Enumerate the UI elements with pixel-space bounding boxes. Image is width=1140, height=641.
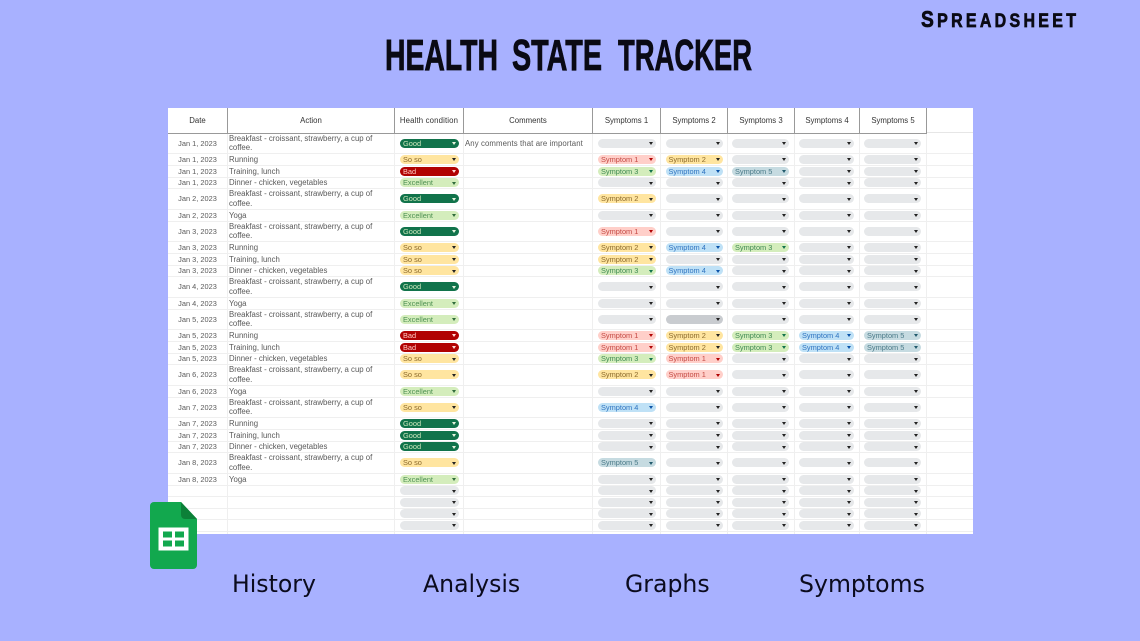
table header: Symptoms 1 [605, 116, 648, 125]
row 3: Jan 1, 2023 [178, 166, 217, 176]
row 12 [168, 298, 972, 310]
row 7: Jan 3, 2023 [178, 227, 217, 236]
row 8: Symptom 4 [668, 243, 706, 252]
row 20: Good [403, 419, 421, 428]
row 3: Training, lunch [229, 166, 280, 176]
row 9: Jan 3, 2023 [178, 254, 217, 264]
row 6: Excellent [403, 210, 433, 220]
row 16: Dinner - chicken, vegetables [229, 354, 327, 363]
row 19: So so [403, 403, 422, 412]
table header: Health condition [400, 116, 458, 125]
row 7 [168, 222, 972, 242]
row 11 [168, 277, 972, 298]
row 24: Excellent [403, 474, 433, 484]
row 15: Symptom 3 [735, 342, 772, 352]
row 8: So so [403, 243, 422, 252]
row 3: Bad [403, 166, 416, 176]
row 23: Breakfast - croissant, strawberry, a cup of coffee. [229, 453, 372, 472]
row 20: Running [229, 419, 258, 428]
row 23: So so [403, 458, 422, 467]
row 17: Breakfast - croissant, strawberry, a cup of coffee. [229, 365, 372, 384]
spreadsheet table [168, 108, 972, 534]
row 14: Jan 5, 2023 [178, 331, 217, 340]
row 4: Jan 1, 2023 [178, 178, 217, 187]
row 6: Yoga [229, 210, 246, 220]
row 1: Jan 1, 2023 [178, 138, 217, 148]
row 14: Bad [403, 331, 416, 340]
row 11: Jan 4, 2023 [178, 282, 217, 291]
row 6: Jan 2, 2023 [178, 210, 217, 220]
row 1: Good [403, 138, 421, 148]
row 22 [168, 442, 972, 453]
row 1: Any comments that are important [465, 138, 583, 148]
icon: google sheets [150, 502, 197, 569]
row 15: Bad [403, 342, 416, 352]
row 7: Good [403, 227, 421, 236]
table header: Symptoms 5 [871, 116, 915, 125]
row 1 [168, 133, 972, 154]
row 3: Symptom 4 [668, 166, 706, 176]
row 16: Jan 5, 2023 [178, 354, 217, 363]
row 15: Symptom 4 [802, 342, 839, 352]
empty row 28 [168, 520, 972, 532]
row 4: Dinner - chicken, vegetables [229, 178, 327, 187]
row 24: Yoga [229, 474, 246, 484]
row 9: So so [403, 254, 422, 264]
row 2: Symptom 2 [668, 155, 706, 164]
row 8 [168, 242, 972, 254]
row 10: Jan 3, 2023 [178, 266, 217, 275]
row 14: Symptom 4 [802, 331, 839, 340]
row 14: Symptom 3 [735, 331, 772, 340]
empty row 27 [168, 508, 972, 520]
row 17: Symptom 1 [668, 370, 706, 379]
table header: Symptoms 2 [672, 116, 716, 125]
row 15 [168, 342, 972, 354]
row 23 [168, 453, 972, 474]
row 14: Running [229, 331, 258, 340]
row 2: Running [229, 155, 258, 164]
row 21 [168, 430, 972, 442]
row 8: Jan 3, 2023 [178, 243, 217, 252]
row 24 [168, 474, 972, 486]
label: analysis: Analysis [423, 570, 520, 598]
row 20 [168, 418, 972, 430]
row 15: Training, lunch [229, 342, 280, 352]
row 7: Breakfast - croissant, strawberry, a cup of coffee. [229, 222, 372, 240]
row 3 [168, 166, 972, 178]
row 12: Yoga [229, 298, 246, 308]
row 18 [168, 386, 972, 398]
label: history: History [232, 570, 316, 598]
label: symptoms: Symptoms [799, 570, 925, 598]
row 15: Jan 5, 2023 [178, 342, 217, 352]
row 17: So so [403, 370, 422, 379]
row 16: So so [403, 354, 422, 363]
subtitle: spreadsheet: SPREADSHEET [921, 6, 1076, 32]
row 21: Good [403, 430, 421, 440]
row 8: Running [229, 243, 258, 252]
row 10: Dinner - chicken, vegetables [229, 266, 327, 275]
row 15: Symptom 1 [601, 342, 638, 352]
row 14 [168, 330, 972, 342]
row 17: Symptom 2 [601, 370, 638, 379]
title [385, 31, 752, 76]
empty row 25 [168, 486, 972, 497]
row 3: Symptom 5 [735, 166, 772, 176]
row 22: Good [403, 442, 421, 451]
row 14: Symptom 1 [601, 331, 638, 340]
row 21: Training, lunch [229, 430, 280, 440]
row 16 [168, 354, 972, 365]
row 8: Symptom 3 [735, 243, 772, 252]
empty row 26 [168, 497, 972, 508]
row 11: Breakfast - croissant, strawberry, a cup of coffee. [229, 277, 372, 296]
row 5: Breakfast - croissant, strawberry, a cup of coffee. [229, 189, 372, 208]
row 12: Jan 4, 2023 [178, 298, 217, 308]
row 21: Jan 7, 2023 [178, 430, 217, 440]
row 9: Symptom 2 [601, 254, 638, 264]
label: graphs: Graphs [625, 570, 710, 598]
row 5: Symptom 2 [601, 194, 638, 203]
row 22: Dinner - chicken, vegetables [229, 442, 327, 451]
row 7: Symptom 1 [601, 227, 638, 236]
row 15: Symptom 5 [867, 342, 904, 352]
row 18: Excellent [403, 386, 433, 396]
row 4 [168, 178, 972, 189]
row 13: Excellent [403, 315, 433, 324]
row 4: Excellent [403, 178, 433, 187]
row 10: Symptom 4 [668, 266, 706, 275]
row 16: Symptom 3 [601, 354, 638, 363]
row 22: Jan 7, 2023 [178, 442, 217, 451]
row 5: Good [403, 194, 421, 203]
row 10: So so [403, 266, 422, 275]
row 19: Jan 7, 2023 [178, 403, 217, 412]
row 2: So so [403, 155, 422, 164]
row 15: Symptom 2 [668, 342, 706, 352]
row 11: Good [403, 282, 421, 291]
row 3: Symptom 3 [601, 166, 638, 176]
row 10 [168, 266, 972, 277]
row 23: Symptom 5 [601, 458, 638, 467]
row 9 [168, 254, 972, 266]
row 8: Symptom 2 [601, 243, 638, 252]
table header: Comments [509, 116, 547, 125]
row 2: Jan 1, 2023 [178, 155, 217, 164]
row 17: Jan 6, 2023 [178, 370, 217, 379]
row 19 [168, 398, 972, 418]
table header: Symptoms 4 [805, 116, 849, 125]
row 24: Jan 8, 2023 [178, 474, 217, 484]
row 9: Training, lunch [229, 254, 280, 264]
table header: Date [189, 116, 206, 125]
row 5: Jan 2, 2023 [178, 194, 217, 203]
row 20: Jan 7, 2023 [178, 419, 217, 428]
row 14: Symptom 2 [668, 331, 706, 340]
row 18: Jan 6, 2023 [178, 386, 217, 396]
row 10: Symptom 3 [601, 266, 638, 275]
row 14: Symptom 5 [867, 331, 904, 340]
row 23: Jan 8, 2023 [178, 458, 217, 467]
table header: Symptoms 3 [739, 116, 783, 125]
row 2 [168, 154, 972, 166]
row 13: Jan 5, 2023 [178, 315, 217, 324]
row 18: Yoga [229, 386, 246, 396]
row 1: Breakfast - croissant, strawberry, a cup of coffee. [229, 134, 372, 152]
row 6 [168, 210, 972, 222]
row 17 [168, 365, 972, 386]
row 13 [168, 310, 972, 330]
row 12: Excellent [403, 298, 433, 308]
row 19: Breakfast - croissant, strawberry, a cup of coffee. [229, 398, 372, 416]
table header [168, 108, 927, 134]
row 19: Symptom 4 [601, 403, 638, 412]
row 5 [168, 189, 972, 210]
row 2: Symptom 1 [601, 155, 638, 164]
row 13: Breakfast - croissant, strawberry, a cup of coffee. [229, 310, 372, 328]
row 16: Symptom 1 [668, 354, 706, 363]
table header: Action [300, 116, 322, 125]
